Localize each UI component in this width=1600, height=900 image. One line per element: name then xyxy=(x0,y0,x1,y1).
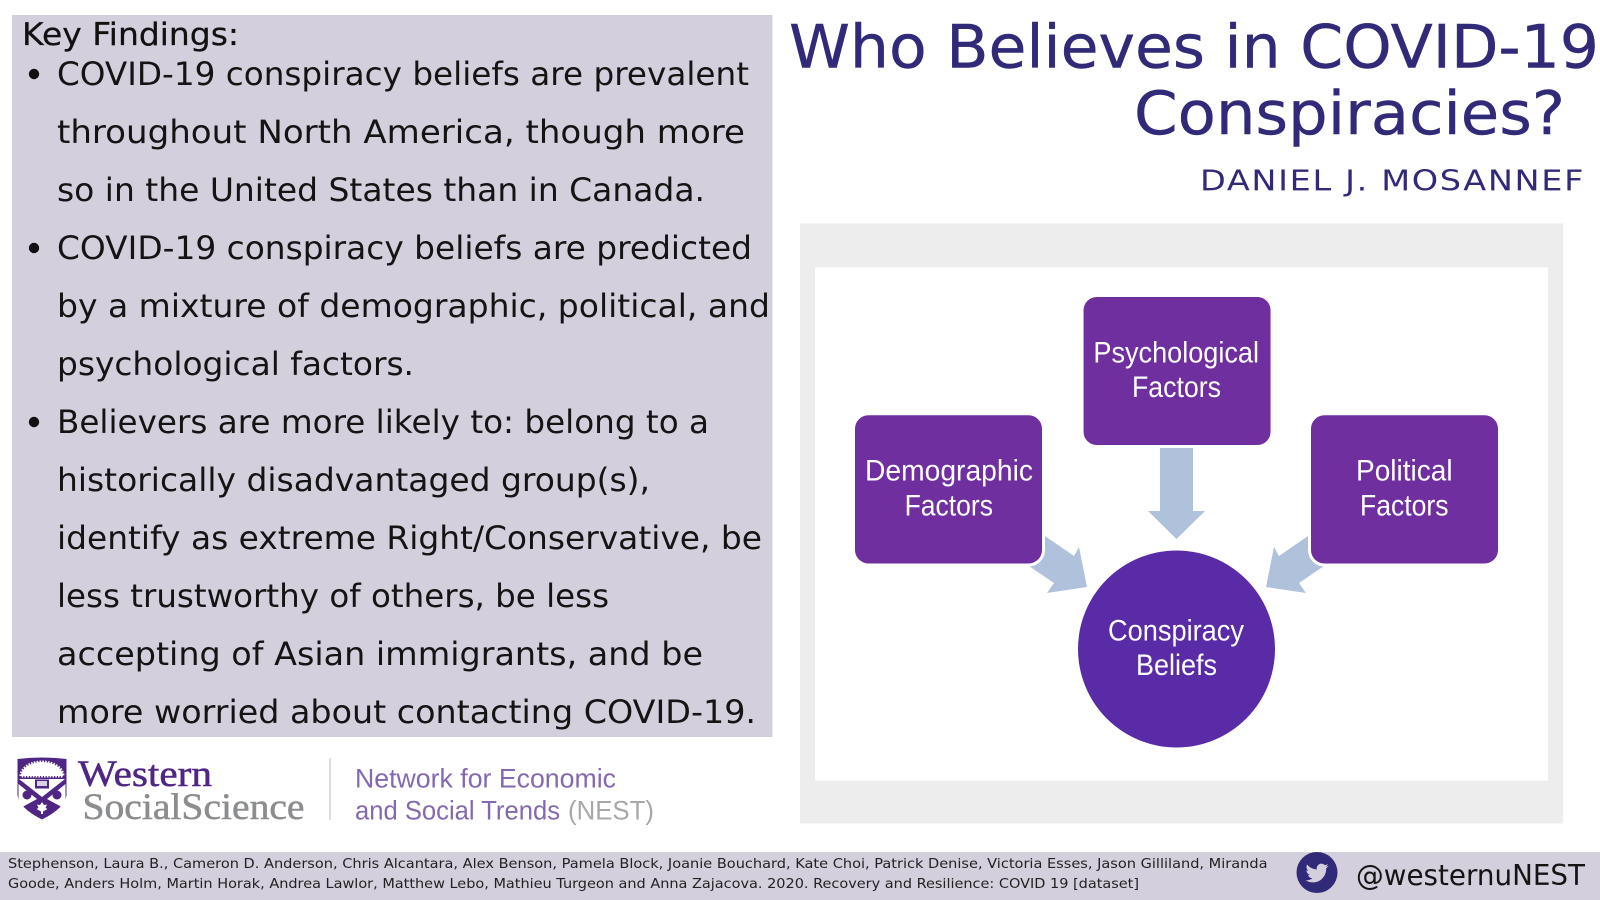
finding 2 text xyxy=(29,229,770,383)
arrow: political to beliefs xyxy=(1266,536,1324,593)
finding 2 text: COVID-19 conspiracy beliefs are predicted xyxy=(57,229,752,267)
finding 3 text xyxy=(29,403,762,731)
circle: conspiracy beliefs: Beliefs xyxy=(1136,649,1217,682)
logo text: network for economic and social trends: (NEST) xyxy=(568,795,654,825)
logo: western social science xyxy=(18,754,304,828)
title: Who Believes in COVID-19 xyxy=(789,13,1599,83)
logo text: network for economic and social trends: Network for Economic xyxy=(355,764,616,794)
finding 3 text: more worried about contacting COVID-19. xyxy=(57,693,756,731)
twitter handle: @westernuNEST xyxy=(1356,858,1585,892)
logo text: network for economic and social trends: and Social Trends xyxy=(355,795,560,825)
title xyxy=(789,13,1599,149)
logo text: network for economic and social trends xyxy=(355,764,654,825)
finding 3 text: historically disadvantaged group(s), xyxy=(57,461,650,499)
citation text: Stephenson, Laura B., Cameron D. Anderson, Chris Alcantara, Alex Benson, Pamela Block, Joanie Bouchard, Kate Choi, Patrick Denise, Victoria Esses, Jason Gilliland, Miranda xyxy=(8,856,1268,872)
citation text: Goode, Anders Holm, Martin Horak, Andrea Lawlor, Matthew Lebo, Mathieu Turgeon and Anna Zajacova. 2020. Recovery and Resilience: COVID 19 [dataset] xyxy=(8,876,1139,892)
finding 1 text xyxy=(29,55,749,209)
arrow: psychological to beliefs xyxy=(1148,448,1205,539)
box: political factors xyxy=(1310,414,1500,565)
icon: twitter xyxy=(1296,852,1338,893)
arrow: demographic to beliefs xyxy=(1029,536,1087,593)
finding 2 text: psychological factors. xyxy=(57,345,414,383)
heading: key findings: Key Findings: xyxy=(22,17,239,53)
panel: key findings xyxy=(12,15,772,737)
box: political factors: Factors xyxy=(1360,490,1448,522)
finding 1 text: COVID-19 conspiracy beliefs are prevalent xyxy=(57,55,749,93)
wordmark: western: Western xyxy=(78,754,212,795)
citation text xyxy=(8,856,1268,892)
panel: diagram frame xyxy=(800,224,1563,824)
circle: conspiracy beliefs xyxy=(1078,550,1275,748)
title: Conspiracies? xyxy=(1134,79,1565,149)
finding 2 text: by a mixture of demographic, political, and xyxy=(57,287,770,325)
finding 1 text: throughout North America, though more xyxy=(57,113,745,151)
footer bar xyxy=(0,852,1600,900)
author name: DANIEL J. MOSANNEF xyxy=(1200,165,1585,198)
icon: western shield xyxy=(18,758,66,820)
finding 3 text: Believers are more likely to: belong to a xyxy=(57,403,709,441)
box: demographic factors: Demographic xyxy=(865,454,1033,488)
circle: conspiracy beliefs: Conspiracy xyxy=(1108,614,1244,648)
wordmark: social science: SocialScience xyxy=(82,787,304,828)
box: psychological factors: Factors xyxy=(1132,371,1221,404)
finding 3 text: accepting of Asian immigrants, and be xyxy=(57,635,703,673)
finding 1 text: so in the United States than in Canada. xyxy=(57,171,705,209)
box: demographic factors xyxy=(854,414,1044,565)
box: political factors: Political xyxy=(1356,454,1453,488)
finding 3 text: less trustworthy of others, be less xyxy=(57,577,609,615)
box: psychological factors: Psychological xyxy=(1093,336,1259,370)
box: psychological factors xyxy=(1083,296,1271,446)
box: demographic factors: Factors xyxy=(905,490,993,522)
finding 3 text: identify as extreme Right/Conservative, be xyxy=(57,519,762,557)
